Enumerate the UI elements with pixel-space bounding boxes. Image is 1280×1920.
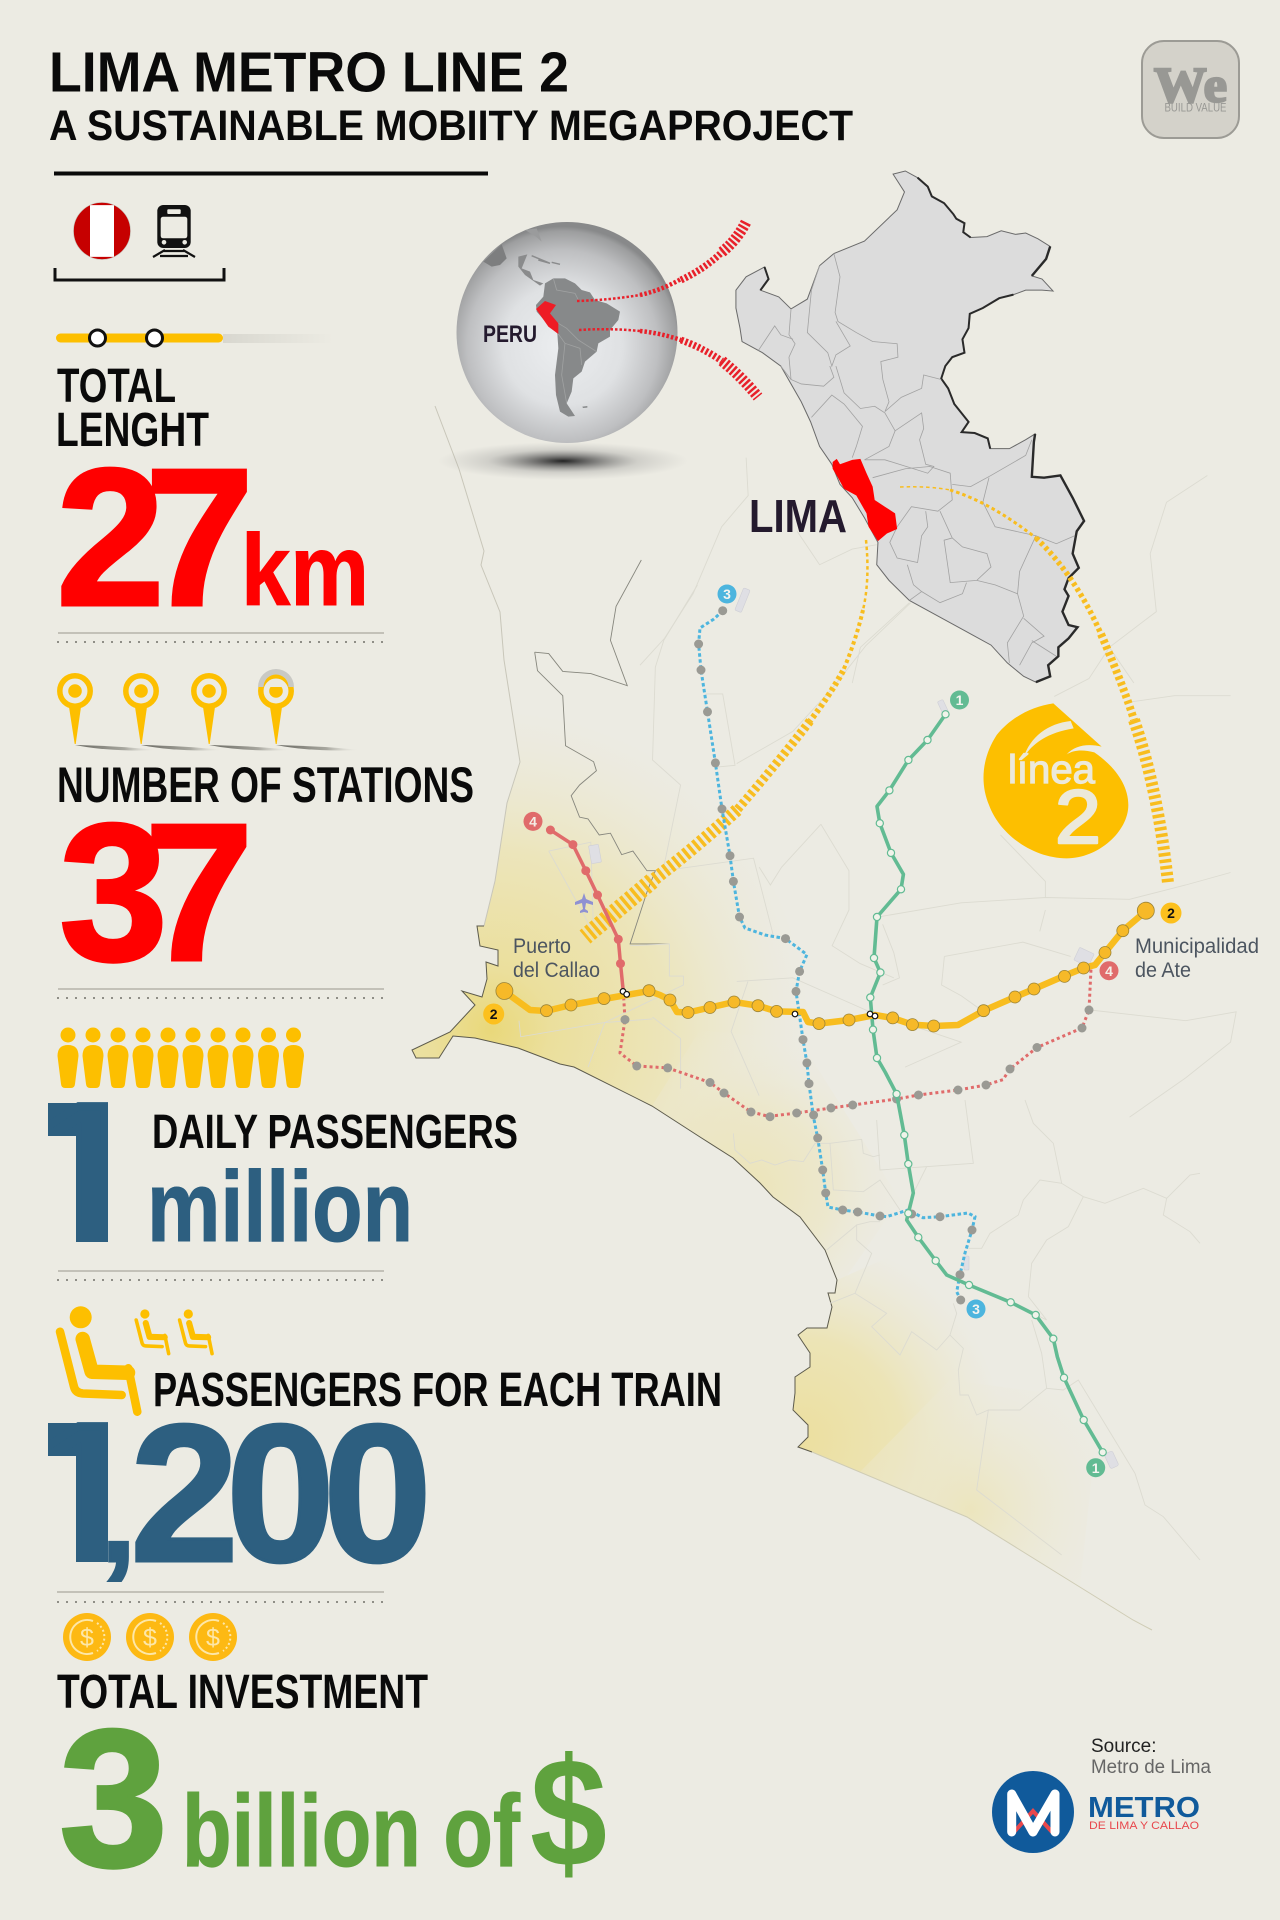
source: Source:: [1091, 1736, 1156, 1757]
divider: [57, 633, 386, 642]
map: district borders: [519, 458, 1236, 1560]
line badges: 1: [1092, 1460, 1100, 1476]
map: Peru country: [736, 171, 1084, 682]
arc: Lima to line 2 east end: [900, 487, 1168, 883]
globe with South America: PERU: [483, 321, 537, 348]
logo: Metro de Lima y Callao: DE LIMA Y CALLAO: [1089, 1820, 1199, 1832]
logo: Metro de Lima y Callao: METRO: [1088, 1792, 1200, 1824]
divider: [57, 989, 386, 998]
section: passengers per train: ,: [101, 1449, 136, 1588]
icon: coins: [63, 1613, 237, 1661]
metro line 2: [496, 902, 1154, 1032]
section: total investment: $: [530, 1726, 607, 1899]
section: total investment: TOTAL INVESTMENT: [57, 1666, 428, 1719]
logo: We Build Value: BUILD VALUE: [1164, 103, 1227, 115]
title: LIMA METRO LINE 2: [49, 40, 569, 104]
logo: linea 2: [983, 703, 1128, 860]
section: total length: LENGHT: [56, 404, 209, 457]
depots: [589, 588, 1119, 1469]
section: total investment: [57, 1666, 607, 1908]
source: [1091, 1736, 1211, 1778]
title: [49, 40, 853, 176]
label: Municipalidad de Ate: Municipalidad: [1135, 935, 1259, 958]
section: passengers per train: 1: [32, 1384, 141, 1603]
logo: Metro de Lima y Callao: [992, 1771, 1200, 1853]
section: passengers per train: PASSENGERS FOR EACH TRAIN: [153, 1364, 722, 1417]
metro line 4: [546, 826, 1094, 1121]
line badges: 4: [529, 814, 537, 830]
section: daily passengers: DAILY PASSENGERS: [152, 1106, 518, 1159]
section: total length: km: [241, 515, 369, 627]
source: Metro de Lima: [1091, 1757, 1211, 1778]
divider: [57, 1592, 386, 1602]
line badges: [483, 584, 1182, 1477]
bracket under icons: [55, 268, 224, 280]
title: A SUSTAINABLE MOBIITY MEGAPROJECT: [49, 102, 853, 150]
section: daily passengers: [48, 1102, 516, 1242]
logo: We Build Value: We: [1154, 56, 1227, 112]
icon: length bar: [56, 330, 333, 346]
icon: airplane: [575, 893, 593, 913]
label: Puerto del Callao: del Callao: [513, 959, 600, 982]
line badges: 1: [956, 692, 964, 708]
divider: [57, 1271, 386, 1280]
section: total investment: billion of: [182, 1774, 521, 1888]
label: Municipalidad de Ate: [1135, 935, 1259, 982]
line badges: 3: [972, 1301, 980, 1317]
label: Lima: LIMA: [749, 490, 847, 542]
label: Municipalidad de Ate: de Ate: [1135, 959, 1191, 982]
logo: linea 2: 2: [1055, 775, 1101, 860]
logo: linea 2: línea: [1008, 748, 1096, 792]
line badges: 3: [723, 586, 731, 602]
map: Lima coastal territory: [412, 406, 1152, 1630]
icon: Peru flag: [74, 202, 130, 260]
line badges: 4: [1105, 963, 1113, 979]
section: number of stations: NUMBER OF STATIONS: [57, 757, 474, 813]
section: total length: [56, 360, 369, 647]
section: passengers per train: 200: [130, 1384, 432, 1603]
label: Puerto del Callao: Puerto: [513, 935, 571, 958]
icon: people row: [58, 1028, 304, 1088]
section: number of stations: [57, 757, 474, 1002]
arc: Lima to line 2 west end: [585, 540, 867, 937]
line badges: 2: [490, 1006, 498, 1022]
icon: passenger seats: [60, 1306, 212, 1412]
icon: station pins: [60, 669, 361, 750]
logo: We Build Value: [1142, 41, 1239, 138]
section: daily passengers: million: [147, 1151, 413, 1263]
section: total length: 27: [56, 428, 254, 647]
metro line 1: [867, 711, 1106, 1456]
label: Puerto del Callao: [513, 935, 600, 982]
section: daily passengers: 1: [32, 1064, 141, 1283]
globe with South America: [438, 222, 688, 480]
metro line 3: [694, 606, 976, 1304]
section: total length: TOTAL: [57, 360, 176, 413]
section: number of stations: 37: [59, 783, 254, 1002]
icon: train: [153, 205, 195, 257]
section: total investment: 3: [59, 1689, 168, 1908]
section: passengers per train: [48, 1372, 720, 1582]
red connector arcs globe to Peru map: [577, 222, 758, 397]
line badges: 2: [1167, 905, 1175, 921]
